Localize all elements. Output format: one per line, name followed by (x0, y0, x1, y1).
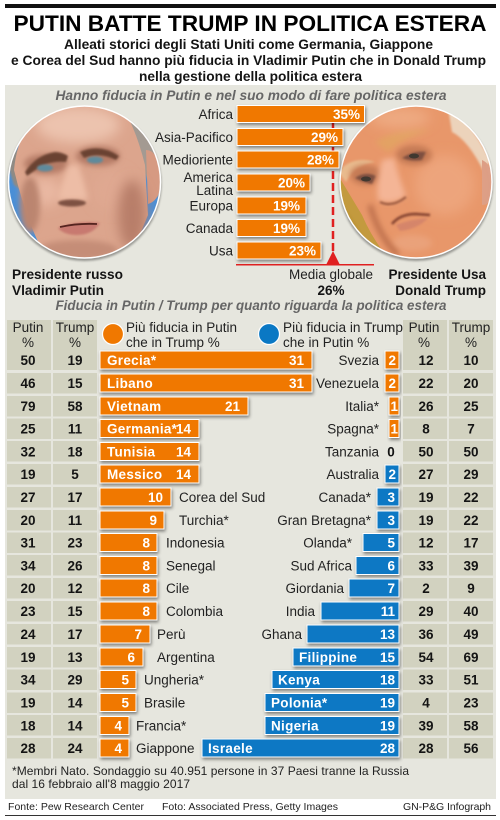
table row 7: Corea del Sud (179, 490, 265, 505)
table row 13: 7 (134, 627, 142, 642)
table row 18: 56 (463, 741, 479, 756)
table row 10: Senegal (166, 558, 216, 574)
table row 15: 33 (418, 672, 434, 688)
table row 10: 6 (387, 558, 395, 574)
footer credits: Foto: Associated Press, Getty Images (162, 801, 338, 813)
table row 2: 20 (463, 376, 479, 391)
table row 1: 12 (418, 353, 434, 368)
table row 15: 18 (380, 672, 395, 688)
table row 9: 31 (20, 536, 36, 550)
table row 1: 19 (67, 353, 83, 368)
bar: Usa: Usa (209, 244, 233, 258)
footnote: *Membri Nato. Sondaggio su 40.951 persone in 37 Paesi tranne la Russia (12, 764, 409, 778)
table row 5: 0 (387, 444, 395, 460)
bar: Europa: 19% (273, 198, 300, 214)
table row 1: Svezia (338, 353, 379, 368)
column header cells: Putin (13, 320, 43, 335)
table row 13: 17 (67, 627, 83, 642)
table row 6: 27 (418, 467, 434, 482)
table row 12: 15 (67, 604, 83, 619)
footnote: dal 16 febbraio all'8 maggio 2017 (12, 777, 190, 791)
table row 17 (7, 715, 493, 736)
table row 9: 8 (142, 536, 150, 550)
table row 2: 46 (20, 376, 36, 391)
section heading: trust in Putin: Hanno fiducia in Putin e nel suo modo di fare politica estera (56, 87, 447, 103)
table row 4: 8 (422, 422, 430, 436)
table row 15: 51 (463, 672, 479, 688)
table row 7: 19 (418, 490, 434, 505)
legend: more trust in Trump: Più fiducia in Trump (283, 320, 403, 335)
table row 1: 10 (463, 353, 479, 368)
axis and global average marker (236, 123, 374, 266)
table row 8: 20 (20, 513, 36, 528)
table row 6: 29 (463, 467, 479, 482)
table row 18: 24 (67, 741, 83, 756)
caption: global average: 26% (317, 283, 345, 298)
caption: Putin (12, 267, 123, 298)
table row 17: Nigeria (271, 718, 319, 734)
bar: Africa: Africa (198, 107, 233, 122)
table row 18: Giappone (136, 741, 195, 756)
table row 18: 4 (114, 741, 122, 756)
table row 6: 19 (20, 467, 36, 482)
table row 13 (7, 624, 493, 644)
table row 9: 23 (67, 536, 83, 550)
table row 6: Messico (107, 467, 162, 482)
caption: global average: Media globale (289, 267, 373, 282)
legend: more trust in Trump: che in Putin % (283, 335, 369, 350)
table row 8: 19 (418, 513, 434, 528)
table row 11: 2 (422, 581, 430, 596)
table row 5: 50 (418, 444, 434, 460)
caption: Putin: Presidente russo (12, 267, 123, 282)
bar: Asia-Pacifico (155, 128, 343, 146)
table row 4: 25 (20, 422, 36, 436)
table row 7: 3 (387, 490, 395, 505)
table row 6 (7, 464, 493, 484)
table row 2: Venezuela (316, 376, 379, 391)
table row 7 (7, 487, 493, 508)
photo: Vladimir Putin (6, 104, 165, 262)
table row 15: Ungheria* (144, 672, 205, 688)
table row 2: Libano (107, 376, 153, 391)
bar: Africa (198, 106, 364, 122)
table row 3: 21 (225, 399, 240, 414)
column header cells: Trump (56, 320, 94, 335)
table row 12: 8 (142, 604, 150, 619)
table row 8: 22 (463, 513, 479, 528)
table row 10: Sud Africa (290, 558, 352, 574)
bar: Asia-Pacifico: 29% (311, 130, 338, 145)
table row 5: 14 (176, 444, 191, 460)
table row 11: Cile (166, 581, 189, 596)
table row 2: 2 (388, 376, 396, 391)
table row 15: Kenya (278, 672, 320, 688)
table row 9: 17 (463, 536, 479, 550)
table row 18: Israele (208, 741, 253, 756)
table row 2: 22 (418, 376, 434, 391)
table row 11: Giordania (285, 581, 344, 596)
legend: more trust in Trump (258, 320, 403, 350)
table row 14: 13 (67, 650, 83, 665)
table row 18: 28 (418, 741, 434, 756)
table row 3: 26 (418, 399, 434, 414)
table row 13: 24 (20, 627, 36, 642)
table row 3: 1 (390, 399, 398, 414)
table row 15: 29 (67, 672, 83, 688)
table row 10: 33 (418, 558, 434, 574)
table row 16: 19 (380, 696, 395, 710)
table row 16: 5 (121, 696, 129, 710)
table row 6: 14 (176, 467, 191, 482)
table row 1 (20, 351, 479, 369)
table row 18 (7, 738, 493, 758)
table row 16: 14 (67, 696, 83, 710)
table row 13: 13 (380, 627, 395, 642)
table row 14: Filippine (299, 650, 357, 665)
subtitle (11, 36, 486, 84)
table row 4: 1 (390, 422, 398, 436)
table row 11: 8 (142, 581, 150, 596)
table row 9: Indonesia (166, 536, 225, 550)
table row 11: 20 (20, 581, 36, 596)
table row 12: India (286, 604, 315, 619)
table row 1: 50 (20, 353, 36, 368)
table row 6: 5 (71, 467, 79, 482)
caption: Trump: Presidente Usa (388, 267, 486, 282)
table row 7: 10 (148, 490, 163, 505)
bar: America Latina (183, 170, 310, 198)
table row 3: 58 (67, 399, 83, 414)
bar: America Latina: 20% (278, 176, 305, 190)
table row 16: 23 (463, 696, 479, 710)
table row 14: 6 (127, 650, 135, 665)
bar: America Latina: America (183, 170, 233, 185)
table row 17: 39 (418, 718, 434, 734)
table row 17: Francia* (136, 718, 187, 734)
table row 14: 19 (20, 650, 36, 665)
bar: Medioriente: 28% (307, 152, 334, 168)
bar: Canada: 19% (273, 221, 300, 236)
table row 5: 18 (67, 444, 83, 460)
table row 2: 15 (67, 376, 83, 391)
bar: Europa: Europa (189, 198, 233, 214)
column header cells: % (418, 335, 430, 350)
table row 10: 8 (142, 558, 150, 574)
bar: Medioriente (162, 151, 339, 168)
table row 18: 28 (380, 741, 395, 756)
table row 17: 58 (463, 718, 479, 734)
table row 17: 14 (67, 718, 83, 734)
table row 4: 14 (176, 422, 191, 436)
table row 16: Polonia* (271, 696, 328, 710)
table row 13: 49 (463, 627, 479, 642)
table row 7: 22 (463, 490, 479, 505)
table row 11: 9 (467, 581, 475, 596)
bar: Canada: Canada (186, 221, 233, 236)
bottom rule (5, 815, 496, 816)
photo: Donald Trump (335, 100, 500, 265)
table row 12: 40 (463, 604, 479, 619)
table row 10: 39 (463, 558, 479, 574)
section heading: comparison: Fiducia in Putin / Trump per quanto riguarda la politica estera (56, 297, 447, 313)
table row 12: Colombia (166, 604, 224, 619)
table row 4: Germania* (107, 422, 178, 436)
caption: Putin: Vladimir Putin (12, 283, 104, 298)
footnote (12, 764, 409, 791)
bar: Asia-Pacifico: Asia-Pacifico (155, 130, 233, 145)
subtitle: Alleati storici degli Stati Uniti come Germania, Giappone (64, 36, 433, 52)
top rule (5, 4, 496, 8)
table row 16 (7, 692, 493, 713)
table row 14: Argentina (157, 650, 215, 665)
table row 5: Tanzania (325, 444, 379, 460)
table row 1: Grecia* (107, 353, 157, 368)
table row 16: 4 (422, 696, 430, 710)
bar: Canada (186, 220, 306, 236)
table row 17: 4 (114, 718, 122, 734)
table row 1: 31 (289, 353, 304, 368)
column header cells (7, 320, 493, 370)
bar: Africa: 35% (333, 107, 360, 122)
table row 10 (7, 555, 493, 576)
bar: America Latina: Latina (196, 183, 233, 198)
table row 13: Perù (157, 627, 186, 642)
bar: Europa (189, 197, 306, 214)
bar: Usa (209, 242, 321, 259)
table row 3: Italia* (345, 399, 380, 414)
table row 18: 28 (20, 741, 36, 756)
table row 6: 2 (388, 467, 396, 482)
regional bar chart (155, 106, 374, 266)
table row 10: 34 (20, 558, 36, 574)
table row 3: Vietnam (107, 399, 161, 414)
table row 8: 3 (387, 513, 395, 528)
table row 12: 11 (381, 604, 395, 619)
table row 7: Canada* (318, 490, 372, 505)
legend: more trust in Putin: Più fiducia in Putin (126, 320, 237, 335)
subtitle: nella gestione della politica estera (139, 68, 362, 84)
table row 16: Brasile (144, 696, 185, 710)
table row 4: 7 (467, 422, 475, 436)
table row 4: 11 (68, 422, 83, 436)
table row 12: 29 (418, 604, 434, 619)
table row 7: 17 (67, 490, 83, 505)
bar: Medioriente: Medioriente (162, 152, 233, 168)
table row 4 (7, 418, 493, 439)
footer credits: Fonte: Pew Research Center (8, 801, 144, 813)
table row 11: 12 (67, 581, 83, 596)
table row 12: 23 (20, 604, 36, 619)
column header cells: % (22, 335, 34, 350)
table row 10: 26 (67, 558, 83, 574)
caption: Trump (388, 267, 486, 298)
table row 9: 5 (387, 536, 395, 550)
table row 8: 11 (68, 513, 83, 528)
bar: Usa: 23% (289, 244, 316, 258)
legend: more trust in Putin: che in Trump % (126, 335, 220, 350)
table row 2: 31 (289, 376, 304, 391)
table row 8: Gran Bretagna* (277, 513, 372, 528)
caption: Trump: Donald Trump (395, 283, 486, 298)
table row 14: 69 (463, 650, 479, 665)
table row 14: 54 (418, 650, 434, 665)
table row 15: 5 (121, 672, 129, 688)
table row 8 (7, 510, 493, 530)
subtitle: e Corea del Sud hanno più fiducia in Vladimir Putin che in Donald Trump (11, 52, 486, 68)
column header cells: % (69, 335, 81, 350)
table row 11: 7 (387, 581, 395, 596)
table row 5: 32 (20, 444, 36, 460)
table row 8: 9 (149, 513, 157, 528)
table row 9: Olanda* (303, 536, 353, 550)
table row 16: 19 (20, 696, 36, 710)
table row 3 (7, 396, 493, 416)
table row 14: 15 (380, 650, 395, 665)
table row 1: 2 (388, 353, 396, 368)
table row 8: Turchia* (179, 513, 230, 528)
table row 4: Spagna* (327, 422, 380, 436)
table row 3: 25 (463, 399, 479, 414)
table row 13: 36 (418, 627, 434, 642)
column header cells: Putin (409, 320, 439, 335)
table row 17: 18 (20, 718, 36, 734)
legend: more trust in Putin (102, 320, 237, 350)
table row 6: Australia (326, 467, 379, 482)
table row 5: Tunisia (107, 444, 156, 460)
table row 13: Ghana (261, 627, 302, 642)
column header cells: % (465, 335, 477, 350)
table row 7: 27 (20, 490, 36, 505)
table row 9 (7, 532, 493, 553)
table row 9: 12 (418, 536, 434, 550)
column header cells: Trump (452, 320, 490, 335)
table row 5: 50 (463, 444, 479, 460)
table row 15: 34 (20, 672, 36, 688)
table row 14 (7, 647, 493, 668)
table row 3: 79 (20, 399, 36, 414)
table row 2 (7, 373, 493, 394)
title: PUTIN BATTE TRUMP IN POLITICA ESTERA (14, 11, 487, 36)
table row 5 (7, 441, 493, 462)
table row 15 (7, 670, 493, 690)
table row 11 (7, 578, 493, 598)
footer credits (8, 801, 491, 813)
table row 17: 19 (380, 718, 395, 734)
footer credits: GN-P&G Infograph (403, 801, 491, 813)
table row 12 (7, 601, 493, 622)
caption: global average (289, 267, 373, 298)
